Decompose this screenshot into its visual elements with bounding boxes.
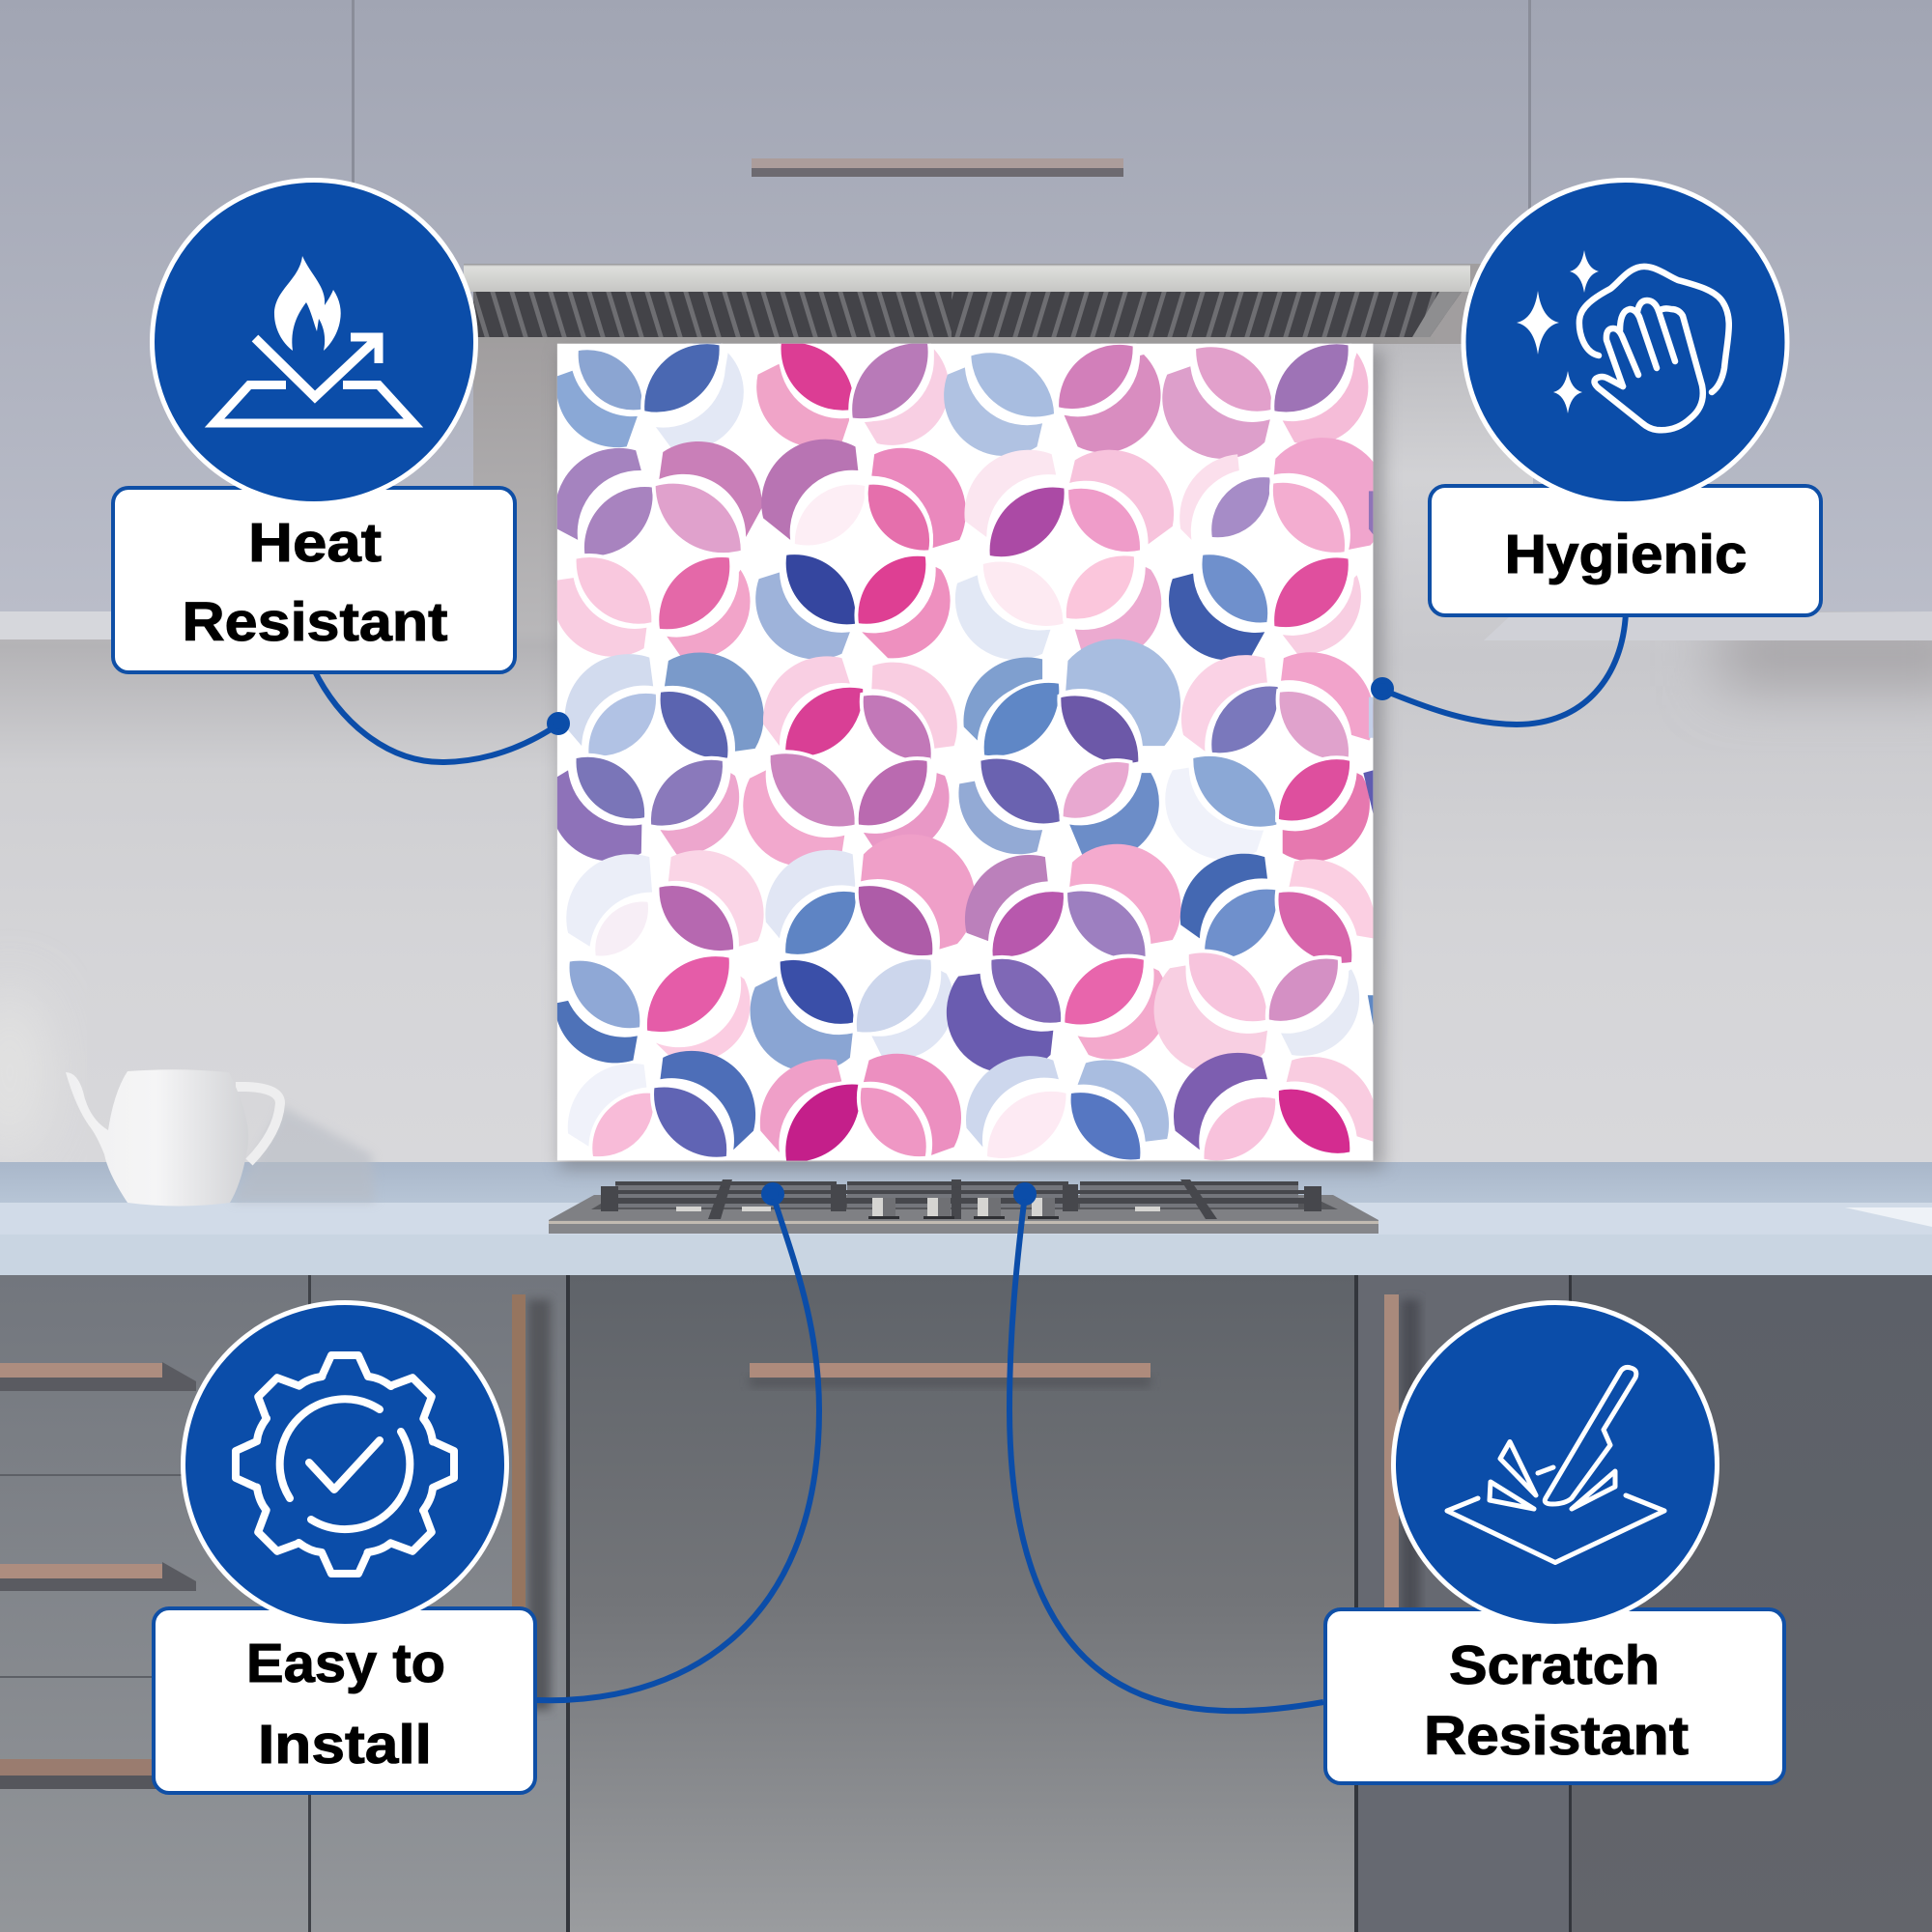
range hood xyxy=(464,264,1470,343)
badge circle: hygienic xyxy=(1463,180,1787,504)
label: easy to install: Easy to xyxy=(246,1633,445,1694)
label: easy to install: Install xyxy=(258,1714,432,1776)
label: hygienic: Hygienic xyxy=(1505,524,1747,585)
callout: heat resistant xyxy=(113,180,515,672)
gas hob xyxy=(549,1179,1378,1234)
badge circle: heat resistant xyxy=(153,180,475,504)
connector: easy to install xyxy=(537,1185,819,1700)
label box: scratch resistant xyxy=(1325,1609,1784,1783)
label: heat resistant: Resistant xyxy=(182,591,448,653)
label: heat resistant: Heat xyxy=(248,512,382,574)
callout: scratch resistant xyxy=(1325,1302,1784,1783)
splashback panel shadow xyxy=(560,350,1383,1169)
kitchen background xyxy=(0,0,1932,1169)
label box: hygienic xyxy=(1430,486,1821,615)
teapot xyxy=(66,1069,375,1206)
icon: knife scratching surface xyxy=(1447,1367,1664,1563)
label: heat resistant xyxy=(182,512,448,653)
callout: easy to install xyxy=(154,1302,535,1793)
connector: heat resistant xyxy=(314,669,567,762)
lower cabinets xyxy=(0,1275,1932,1932)
cabinet handles: lower xyxy=(0,1294,1420,1789)
connector: scratch resistant xyxy=(1009,1185,1323,1711)
label: easy to install xyxy=(246,1633,445,1776)
icon: hand wiping with sparkles xyxy=(1517,250,1729,430)
badge circle: scratch resistant xyxy=(1393,1302,1718,1627)
label box: heat resistant xyxy=(113,488,515,672)
cabinet handle: upper xyxy=(752,158,1123,177)
label: scratch resistant: Scratch xyxy=(1449,1634,1660,1696)
splashback panel: watercolour pattern xyxy=(551,341,1387,1164)
icon: gear with check mark xyxy=(235,1354,455,1575)
label: scratch resistant: Resistant xyxy=(1424,1705,1689,1767)
countertop xyxy=(0,1162,1932,1275)
icon: flame over reflecting surface xyxy=(214,256,413,423)
badge circle: easy to install xyxy=(184,1302,506,1627)
connector: hygienic xyxy=(1374,612,1626,724)
label: scratch resistant xyxy=(1424,1634,1689,1767)
label box: easy to install xyxy=(154,1608,535,1793)
callout: hygienic xyxy=(1430,180,1821,615)
